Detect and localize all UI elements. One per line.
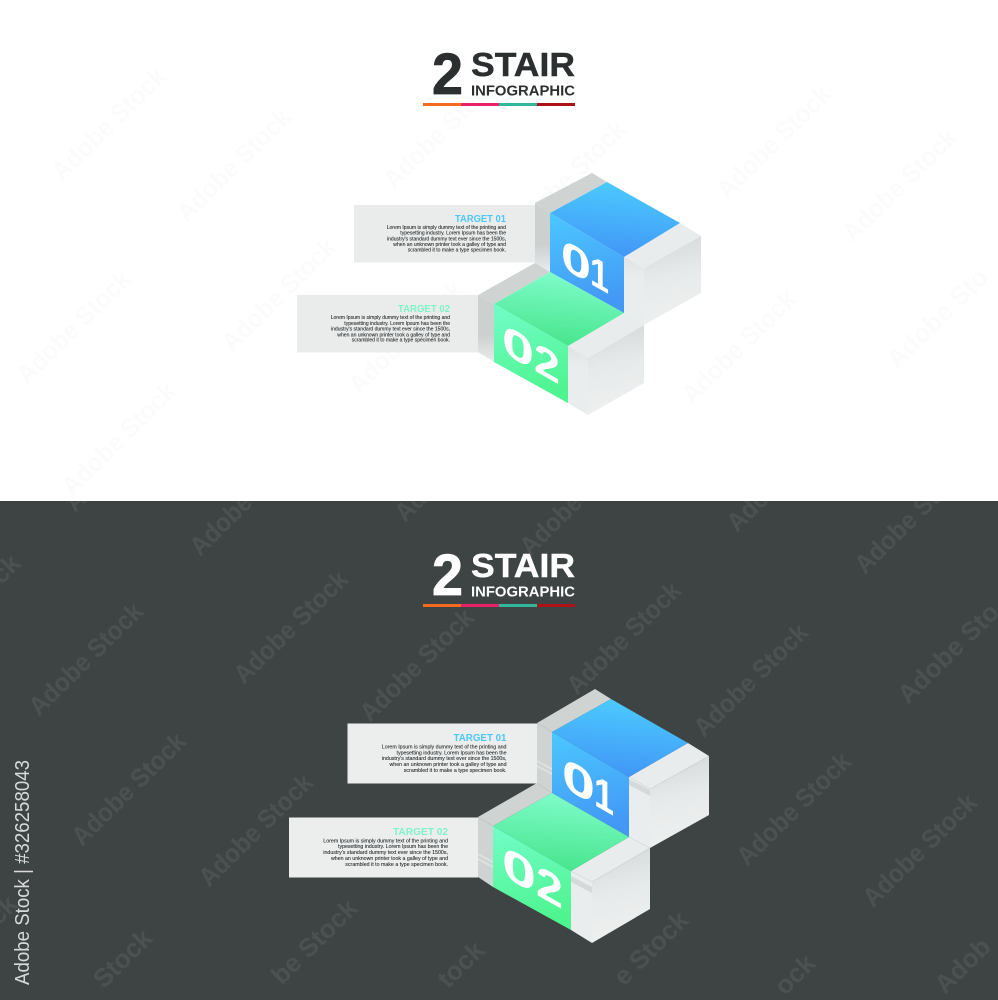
- text block: target 01: typesetting industry. Lorem Ipsum has been the: [396, 750, 506, 756]
- text block: target 01: scrambled it to make a type specimen book.: [408, 248, 506, 254]
- background: white upper half: [0, 0, 998, 501]
- number 01: 0: [562, 748, 595, 816]
- number 01: 0: [561, 229, 591, 293]
- watermarks on dark half: e Stock: [607, 905, 695, 991]
- text block: target 01: Lorem Ipsum is simply dummy text of the printing and: [382, 745, 506, 751]
- panel: target 01: [354, 205, 535, 262]
- text block: target 01: [387, 225, 506, 254]
- watermarks on white half: Adobe Stock: [45, 61, 172, 186]
- number 01: 1: [590, 246, 609, 304]
- text block: target 02: industry's standard dummy text ever since the 1500s,: [331, 327, 450, 333]
- watermarks on dark half: Adob: [928, 931, 997, 999]
- panel: target 02: [297, 295, 478, 352]
- watermarks on dark half: Adobe Stock: [22, 596, 149, 721]
- step 2 structure: [478, 263, 644, 415]
- title: dark version: [423, 543, 576, 608]
- number 02: [502, 836, 563, 920]
- watermarks on white half: Adobe Stock: [170, 102, 297, 227]
- title word STAIR: STAIR: [471, 547, 575, 584]
- watermarks on white half: Adobe Stock: [342, 274, 469, 399]
- number 02: 2: [536, 855, 563, 920]
- title numeral: 2: [432, 543, 463, 608]
- step 1 structure: [535, 173, 701, 325]
- watermarks on white half: Adobe Stock: [505, 114, 632, 239]
- number 02: [502, 314, 560, 394]
- heading: target 01: TARGET 01: [454, 733, 507, 744]
- colour rule: [423, 103, 575, 106]
- watermarks on white half: Adobe Stock: [675, 284, 802, 409]
- watermarks on dark half: Stock: [87, 923, 159, 994]
- stair diagram: dark version: [289, 689, 709, 943]
- watermarks on dark half: Adobe Stock: [65, 726, 192, 851]
- watermarks on dark half: Adobe Stock: [560, 575, 687, 700]
- number 02: 0: [502, 836, 536, 905]
- watermarks on dark half: Adobe Stock: [192, 767, 319, 892]
- watermarks on dark half: Adobe Stock: [183, 436, 310, 561]
- watermarks on dark half: Adobe Stock: [720, 412, 847, 537]
- title word STAIR: STAIR: [471, 46, 575, 83]
- text block: target 01: industry's standard dummy text ever since the 1500s,: [382, 756, 507, 762]
- step 2 green tread: [493, 793, 629, 871]
- colour rule: [423, 604, 575, 607]
- text block: target 02: when an unknown printer took a galley of type and: [337, 332, 450, 338]
- text block: target 01: Lorem Ipsum is simply dummy text of the printing and: [387, 225, 506, 231]
- text block: target 02: typesetting industry. Lorem Ipsum has been the: [344, 321, 450, 327]
- step 1 blue tread: [552, 699, 688, 777]
- watermarks on dark half: be Stock: [265, 893, 364, 990]
- text block: target 02: when an unknown printer took a galley of type and: [330, 856, 448, 862]
- panel: target 02: [289, 818, 478, 878]
- text block: target 01: typesetting industry. Lorem Ipsum has been the: [400, 231, 506, 237]
- background: dark lower half: [0, 501, 998, 1000]
- text block: target 02: industry's standard dummy text ever since the 1500s,: [323, 850, 448, 856]
- step 2 green riser: [493, 826, 571, 930]
- watermarks on white half: Adobe Stock: [55, 376, 182, 501]
- watermarks on dark half: Adobe Stock: [687, 617, 814, 742]
- panel: target 01: [348, 724, 538, 784]
- watermarks on dark half: Adobe Stock: [227, 564, 354, 689]
- number 01: 1: [594, 766, 614, 826]
- stock id vertical label: Adobe Stock | #326258043: [12, 760, 34, 985]
- number 01: [561, 229, 609, 304]
- step 1 structure: [537, 689, 709, 848]
- text block: target 01: when an unknown printer took a galley of type and: [389, 762, 507, 768]
- title numeral: 2: [432, 42, 463, 107]
- text block: target 02: [323, 839, 448, 868]
- number 02: 0: [502, 314, 534, 380]
- stair diagram: light version: [297, 173, 701, 415]
- watermarks on dark half: Adobe Stock: [513, 436, 640, 561]
- step 2 green tread: [494, 272, 624, 346]
- text block: target 01: [382, 745, 507, 774]
- text block: target 01: when an unknown printer took a galley of type and: [393, 242, 506, 248]
- watermarks on dark half: Adobe Stock: [856, 787, 983, 912]
- text block: target 02: Lorem Ipsum is simply dummy text of the printing and: [331, 315, 450, 321]
- watermarks on dark half: Adobe Stock: [730, 746, 857, 871]
- watermarks on white half: Adobe Stock: [710, 79, 837, 204]
- text block: target 02: typesetting industry. Lorem Ipsum has been the: [338, 844, 448, 850]
- watermarks on dark half: tock: [431, 935, 491, 994]
- text block: target 01: scrambled it to make a type specimen book.: [404, 768, 506, 774]
- text block: target 01: industry's standard dummy text ever since the 1500s,: [387, 236, 506, 242]
- subtitle INFOGRAPHIC: INFOGRAPHIC: [471, 84, 576, 100]
- watermarks on white half: Adobe Stock: [215, 232, 342, 357]
- heading: target 01: TARGET 01: [455, 214, 506, 225]
- text block: target 02: [331, 315, 450, 344]
- watermarks on white half: Adobe Sto: [880, 262, 994, 374]
- step 2 green riser: [494, 304, 568, 403]
- step 1 blue riser: [552, 732, 629, 837]
- text block: target 02: Lorem Ipsum is simply dummy text of the printing and: [323, 839, 448, 845]
- watermarks on dark half: Adobe Stock: [848, 454, 975, 579]
- watermarks on white half: Adobe Stock: [836, 122, 963, 247]
- heading: target 02: TARGET 02: [398, 304, 450, 315]
- step 1 blue tread: [550, 182, 680, 257]
- watermarks on white half: Adobe Stock: [10, 264, 137, 389]
- title: light version: [423, 42, 576, 107]
- watermarks on white half: Adobe Stock: [377, 69, 504, 194]
- watermarks on dark half: Adobe Stock: [388, 402, 515, 527]
- step 2 structure: [478, 783, 650, 943]
- watermarks on dark half: ock: [768, 948, 822, 1000]
- watermarks on dark half: Adobe Stock: [353, 602, 480, 727]
- step 1 blue riser: [550, 213, 624, 313]
- number 01: [562, 748, 614, 826]
- heading: target 02: TARGET 02: [393, 827, 448, 838]
- watermarks on white half: [10, 61, 994, 501]
- watermarks on dark half: [0, 392, 998, 1000]
- subtitle INFOGRAPHIC: INFOGRAPHIC: [471, 584, 576, 600]
- text block: target 02: scrambled it to make a type specimen book.: [345, 862, 448, 868]
- watermarks on dark half: Adobe Stock: [58, 392, 185, 517]
- number 02: 2: [534, 332, 560, 394]
- text block: target 02: scrambled it to make a type specimen book.: [352, 338, 450, 344]
